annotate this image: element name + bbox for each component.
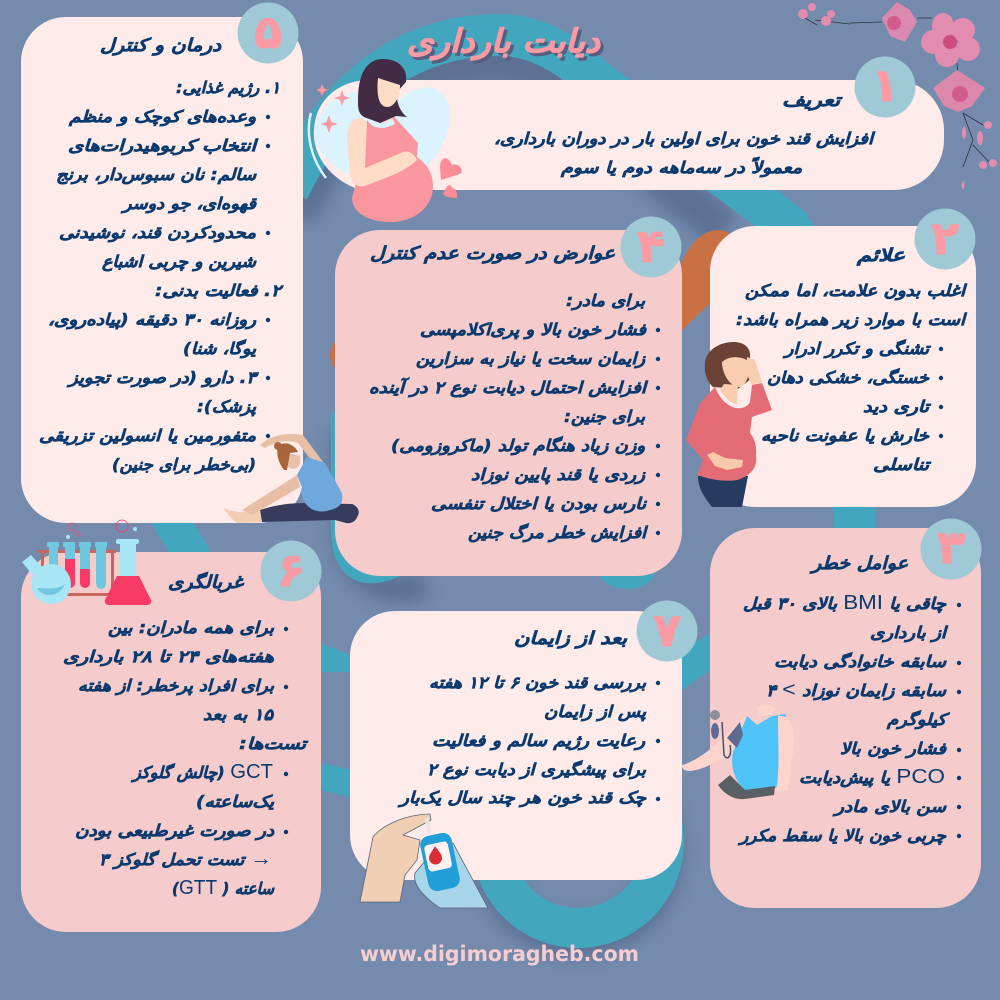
number badge 5: [238, 2, 298, 64]
number badge 7: [636, 600, 698, 662]
teal segments between panels: [321, 553, 712, 797]
illustration: cherry blossom branch: [798, 2, 997, 189]
text block: complications: [369, 291, 660, 543]
text block: screening: برای افراد پرخطر: از هفته: [78, 676, 275, 696]
text block: treatment: انتخاب کربوهیدرات‌های: [68, 136, 259, 156]
text block: treatment: روزانه ۳۰ دقیقه (پیاده‌روی،: [48, 310, 256, 330]
text block: screening: برای همه مادران: بین: [108, 618, 275, 638]
number badge 6: [260, 540, 322, 602]
number badge 2: ۲: [931, 211, 959, 265]
text block: treatment: یوگا، شنا): [183, 339, 257, 359]
illustration: glucose meter in hands: [360, 814, 488, 908]
text block: definition: معمولاً در سه‌ماهه دوم یا سوم: [560, 157, 802, 178]
text block: complications: وزن زیاد هنگام تولد (ماکروزومی): [391, 436, 645, 456]
illustration: lab flasks and test tubes: [22, 520, 151, 605]
text block: definition: [494, 129, 876, 178]
panel: 2 symptoms: [710, 208, 976, 507]
text block: screening: → تست تحمل گلوکز ۳: [99, 848, 272, 870]
text block: treatment: (بی‌خطر برای جنین): [112, 455, 256, 475]
number badge 4: ۴: [637, 219, 665, 273]
text block: treatment: وعده‌های کوچک و منظم: [68, 107, 256, 127]
illustration: blood pressure check: [682, 705, 794, 799]
panel: 5 treatment and control: [21, 2, 303, 523]
text block: after delivery: [397, 673, 660, 808]
text block: risk factors: فشار خون بالا: [840, 739, 948, 759]
text block: treatment: شیرین و چربی اشباع: [102, 252, 257, 272]
text block: symptoms: خستگی، خشکی دهان: [767, 368, 930, 387]
text block: complications: نارس بودن یا اختلال تنفسی: [431, 494, 648, 514]
text block: screening: یک‌ساعته): [196, 792, 275, 811]
text block: after delivery: رعایت رژیم سالم و فعالیت: [432, 731, 645, 751]
text block: definition: افزایش قند خون برای اولین بار در دوران بارداری،: [494, 129, 876, 149]
number badge 1: [854, 56, 916, 118]
text block: risk factors: از بارداری: [870, 623, 949, 643]
text block: complications: فشار خون بالا و پری‌اکلامپسی: [420, 320, 648, 340]
title: دیابت بارداری: [407, 22, 601, 61]
illustration: pregnant woman with heart: [309, 59, 462, 222]
text block: risk factors: کیلوگرم: [886, 710, 951, 730]
text block: after delivery: برای پیشگیری از دیابت نوع ۲: [427, 760, 647, 780]
heading: definition: تعریف: [782, 91, 843, 111]
text block: treatment: سالم: نان سبوس‌دار، برنج: [56, 165, 257, 185]
number badge 2: [914, 208, 976, 270]
text block: treatment: پزشک):: [197, 397, 257, 417]
illustration: yoga pregnant woman: [223, 434, 359, 523]
heading: risk factors: عوامل خطر: [809, 554, 909, 574]
text block: screening: ۱۵ به بعد: [203, 705, 275, 724]
text block: complications: زردی یا قند پایین نوزاد: [471, 465, 646, 485]
text block: symptoms: [736, 281, 968, 474]
text block: screening: هفته‌های ۲۴ تا ۲۸ بارداری: [63, 647, 275, 667]
footer url: www.digimoragheb.com: [360, 942, 639, 966]
heading: symptoms: علائم: [856, 246, 906, 266]
text block: screening: ساعته ( GTT): [172, 877, 275, 899]
heading: complications: عوارض در صورت عدم کنترل: [370, 244, 616, 264]
heading: after delivery: بعد از زایمان: [514, 629, 628, 649]
number badge 1: ۱: [871, 58, 899, 112]
text block: after delivery: بررسی قند خون ۶ تا ۱۲ هفته: [429, 673, 647, 693]
number badge 4: [620, 216, 682, 278]
text block: risk factors: چربی خون بالا یا سقط مکرر: [737, 826, 947, 846]
text block: complications: زایمان سخت یا نیاز به سزارین: [416, 349, 646, 369]
text block: treatment: ۳. دارو (در صورت تجویز: [66, 368, 260, 388]
number badge 3: ۳: [937, 520, 965, 574]
text block: symptoms: تاری دید: [863, 397, 932, 417]
text block: risk factors: PCO یا پیش‌دیابت: [799, 766, 945, 788]
text block: risk factors: [737, 592, 961, 846]
text block: screening: GCT (چالش گلوکز: [130, 761, 273, 783]
orange shape: [330, 230, 735, 373]
text block: complications: برای مادر:: [566, 291, 646, 311]
text block: complications: افزایش احتمال دیابت نوع ۲ در آینده: [369, 377, 649, 398]
number badge 6: ۶: [277, 543, 305, 597]
panel: 4 complications: [335, 216, 682, 576]
text block: after delivery: چک قند خون هر چند سال یک‌بار: [397, 788, 647, 808]
background ribbon shape: [167, 35, 855, 938]
text block: treatment: [39, 78, 284, 475]
panel: 6 screening: [21, 540, 322, 932]
illustration: woman with headache: [686, 342, 772, 507]
text block: complications: برای جنین:: [564, 407, 646, 427]
title: دیابت بارداری: [410, 25, 604, 64]
panel: 7 after delivery: [350, 600, 698, 880]
text block: risk factors: سابقه خانوادگی دیابت: [774, 652, 947, 672]
heading: treatment: درمان و کنترل: [100, 36, 222, 56]
text block: treatment: متفورمین یا انسولین تزریقی: [39, 426, 256, 446]
text block: after delivery: پس از زایمان: [544, 702, 647, 722]
heading: screening: غربالگری: [168, 571, 245, 593]
text block: treatment: محدودکردن قند، نوشیدنی: [59, 223, 256, 243]
text block: risk factors: سن بالای مادر: [832, 797, 947, 817]
text block: screening: [63, 618, 309, 899]
number badge 7: ۷: [653, 603, 681, 657]
text block: treatment: ۱. رژیم غذایی:: [176, 78, 280, 98]
text block: symptoms: است با موارد زیر همراه باشد:: [736, 310, 968, 330]
text block: screening: تست‌ها:: [239, 734, 309, 753]
text block: treatment: قهوه‌ای، جو دوسر: [120, 194, 257, 214]
text block: symptoms: اغلب بدون علامت، اما ممکن: [745, 281, 968, 301]
text block: risk factors: چاقی یا BMI بالای ۳۰ قبل: [743, 592, 947, 614]
text block: screening: در صورت غیرطبیعی بودن: [75, 821, 275, 841]
text block: symptoms: خارش یا عفونت ناحیه: [761, 426, 930, 446]
text block: complications: افزایش خطر مرگ جنین: [468, 523, 649, 543]
panel: 1 definition: [360, 56, 944, 190]
text block: risk factors: سابقه زایمان نوزاد > ۴: [766, 679, 947, 701]
text block: symptoms: تناسلی: [873, 455, 932, 474]
text block: symptoms: تشنگی و تکرر ادرار: [782, 339, 932, 359]
number badge 3: [920, 518, 982, 580]
number badge 5: ۵: [254, 5, 282, 59]
panel: 3 risk factors: [710, 518, 982, 908]
text block: treatment: ۲. فعالیت بدنی:: [155, 281, 284, 300]
